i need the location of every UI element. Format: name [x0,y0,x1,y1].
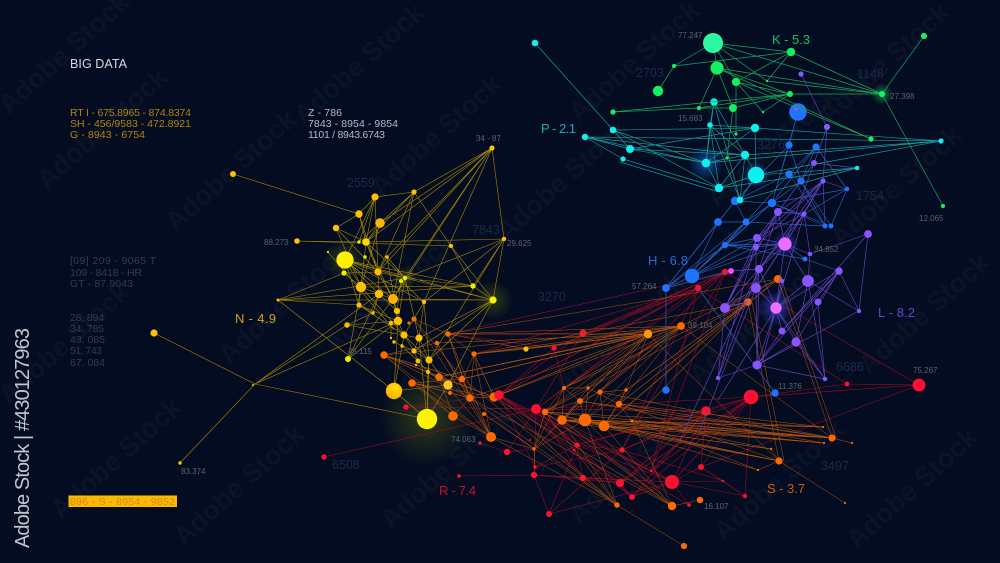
stock watermarks: Adobe Stock [45,391,188,525]
small value labels: 29.625 [507,239,532,248]
text block: amber data: SH - 456/9583 - 472.8921 [70,118,191,130]
ghost numbers: 1148 [857,67,884,81]
cluster labels: P - 2.1 [541,121,576,136]
text block: grey numbers: 67. 084 [70,357,105,369]
yellow edges [154,148,504,463]
title: BIG DATA [70,57,128,71]
text block: grey data [70,255,157,290]
cluster labels: H - 6.8 [648,253,688,268]
ghost numbers: 7843 [472,223,500,237]
stock watermarks: Adobe Stock [841,421,984,555]
small value labels: 88.273 [264,238,289,247]
text block: grey numbers [70,312,105,369]
small value labels: 57.264 [632,282,657,291]
red nodes [321,269,925,517]
ghost numbers: 1754 [856,189,884,203]
blue cluster [662,103,849,397]
stock watermarks: Adobe Stock [563,396,706,530]
text block: white data: Z - 786 [308,107,342,119]
stock watermarks: Adobe Stock [375,401,518,535]
text block: grey numbers: 51. 743 [70,345,102,357]
purple cluster [680,71,872,440]
small value labels: 77.247 [678,31,703,40]
red edges [324,272,919,514]
ghost numbers: 6508 [332,458,360,472]
small value labels: 39.104 [688,321,713,330]
stock watermarks: Adobe Stock [825,119,968,253]
stock watermarks: Adobe Stock [548,266,691,400]
text block: white data: 7843 - 8954 - 9854 [308,118,398,130]
text block: amber data [70,107,191,141]
purple nodes [716,71,872,381]
cluster labels: L - 8.2 [878,305,915,320]
stock watermarks: Adobe Stock [813,0,956,130]
ghost numbers: 2559 [347,176,375,190]
ghost numbers [332,66,884,473]
stock watermarks: Adobe Stock [701,79,844,213]
text block: amber data: RT I - 675.8965 - 874.8374 [70,107,191,119]
ghost numbers: 3497 [821,459,849,473]
small value labels: 74.063 [451,435,476,444]
small value labels: 34.852 [814,245,839,254]
vertical credit: Adobe Stock | #430127963 [12,328,34,548]
cluster labels: R - 7.4 [439,483,476,498]
stock watermarks: Adobe Stock [318,226,461,360]
text block: grey data: 109 - 8418 - HR [70,267,142,279]
stock watermarks: Adobe Stock [853,246,996,380]
cluster labels [235,32,915,498]
green cluster [610,33,945,208]
text block: grey numbers: 34. 785 [70,323,104,335]
small value labels [181,31,944,511]
cluster labels: K - 5.3 [772,32,810,47]
text block: grey numbers: 28. 894 [70,312,104,324]
stock watermarks: Adobe Stock [213,236,356,370]
stock watermarks: Adobe Stock [491,113,634,247]
highlighted code bar: 896 - S - 8954 - 9852 [70,496,175,508]
text block: white data [308,107,398,141]
green edges [613,36,943,206]
small value labels: 11.376 [778,382,802,391]
ghost numbers: 2703 [636,66,664,80]
small value labels: 75.267 [913,366,938,375]
small value labels: 27.398 [890,92,915,101]
stock watermarks: Adobe Stock [683,256,826,390]
purple edges [680,74,868,440]
cyan edges [535,43,941,200]
small value labels: 12.065 [919,214,944,223]
cluster labels: N - 4.9 [235,311,276,326]
text block: amber data: G - 8943 - 6754 [70,129,145,141]
blue nodes [662,103,849,397]
small value labels: 83.374 [181,467,206,476]
text block: white data: 1101 / 8943.6743 [308,129,385,141]
stock watermarks: Adobe Stock [288,0,431,130]
ghost numbers: 6686 [836,360,864,374]
small value labels: 16.107 [704,502,729,511]
yellow nodes [150,145,529,465]
ghost numbers: 3276 [757,138,785,152]
cyan cluster [532,40,944,203]
glows [325,83,893,467]
yellow cluster [150,145,529,465]
green nodes [610,33,945,208]
text block: grey data: GT - 87.9043 [70,278,133,290]
cyan nodes [532,40,944,203]
stock watermarks: Adobe Stock [365,68,508,202]
stock watermarks: Adobe Stock [160,103,303,237]
small value labels: 15.683 [678,114,703,123]
text block: grey numbers: 43. 085 [70,334,105,346]
cluster labels: S - 3.7 [767,481,805,496]
small value labels: 34 - 87 [476,134,501,143]
stock watermarks: Adobe Stock [31,61,174,195]
ghost numbers: 3270 [538,290,566,304]
stock watermarks: Adobe Stock [708,413,851,547]
stock watermarks: Adobe Stock [168,418,311,552]
orange cluster [380,275,853,549]
red cluster [321,269,925,517]
orange nodes [380,275,853,549]
small value labels: 45.115 [348,347,372,356]
orange edges [384,279,852,546]
blue edges [666,112,847,393]
text block: grey data: [09] 209 - 9065 T [70,255,157,267]
